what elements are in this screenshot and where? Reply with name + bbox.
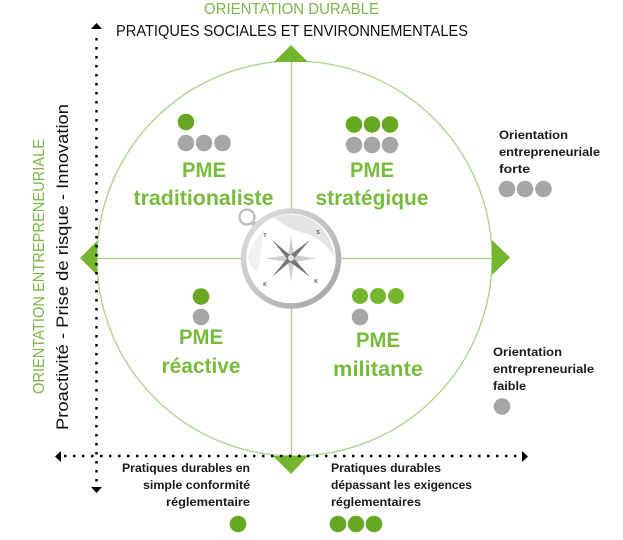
legend: pratiques durables dépassant les exigences: réglementaires (331, 495, 421, 509)
quadrant circle (97, 61, 492, 456)
arrow: left (80, 241, 97, 275)
legend: orientation entrepreneuriale forte: forte (499, 162, 530, 176)
legend: pratiques durables dépassant les exigences: Pratiques durables (331, 461, 441, 475)
legend: orientation entrepreneuriale faible (493, 345, 594, 415)
legend: orientation entrepreneuriale forte (499, 128, 600, 197)
legend: pratiques durables dépassant les exigences: dépassant les exigences (331, 478, 472, 492)
title: orientation durable: ORIENTATION DURABLE (204, 1, 379, 18)
arrow: bottom (273, 456, 308, 474)
icon: compass (240, 210, 338, 306)
quadrant: PME stratégique: PME (350, 159, 394, 182)
quadrant: PME stratégique: stratégique (316, 187, 428, 210)
legend: pratiques durables en simple conformité: Pratiques durables en (122, 461, 250, 475)
legend: pratiques durables en simple conformité: réglementaire (166, 495, 250, 509)
quadrant: PME réactive: réactive (162, 355, 240, 378)
title: pratiques sociales et environnementales: PRATIQUES SOCIALES ET ENVIRONNEMENTALES (116, 23, 468, 40)
quadrant: PME militante (333, 288, 423, 381)
quadrant: PME réactive: PME (179, 326, 223, 349)
quadrant: PME réactive (162, 288, 240, 378)
icon: compass: K (263, 282, 267, 288)
quadrant: PME militante: militante (333, 358, 423, 381)
legend: pratiques durables en simple conformité: simple conformité (143, 478, 250, 492)
title: proactivité, prise de risque, innovation: Proactivité - Prise de risque - Innovation (53, 104, 72, 430)
icon: compass: S (316, 230, 320, 236)
icon: compass: K (314, 279, 318, 285)
legend: pratiques durables dépassant les exigences (330, 461, 472, 532)
legend: orientation entrepreneuriale faible: entrepreneuriale (493, 362, 594, 376)
title: orientation entrepreneuriale: ORIENTATION ENTREPRENEURIALE (31, 139, 48, 394)
legend: orientation entrepreneuriale faible: faible (493, 379, 526, 393)
quadrant: PME traditionaliste (134, 114, 274, 210)
quadrant: PME traditionaliste: PME (182, 159, 226, 182)
vertical dotted axis (91, 23, 102, 493)
legend: orientation entrepreneuriale forte: entrepreneuriale (499, 145, 600, 159)
quadrant: PME militante: PME (356, 329, 400, 352)
legend: orientation entrepreneuriale faible: Orientation (493, 345, 562, 359)
quadrant: PME stratégique (316, 116, 428, 210)
arrow: top (274, 45, 308, 62)
icon: compass: T (263, 233, 267, 239)
legend: orientation entrepreneuriale forte: Orientation (499, 128, 568, 142)
arrow: right (492, 240, 510, 275)
legend: pratiques durables en simple conformité (122, 461, 250, 532)
quadrant: PME traditionaliste: traditionaliste (134, 187, 274, 210)
horizontal dotted axis (55, 451, 528, 462)
